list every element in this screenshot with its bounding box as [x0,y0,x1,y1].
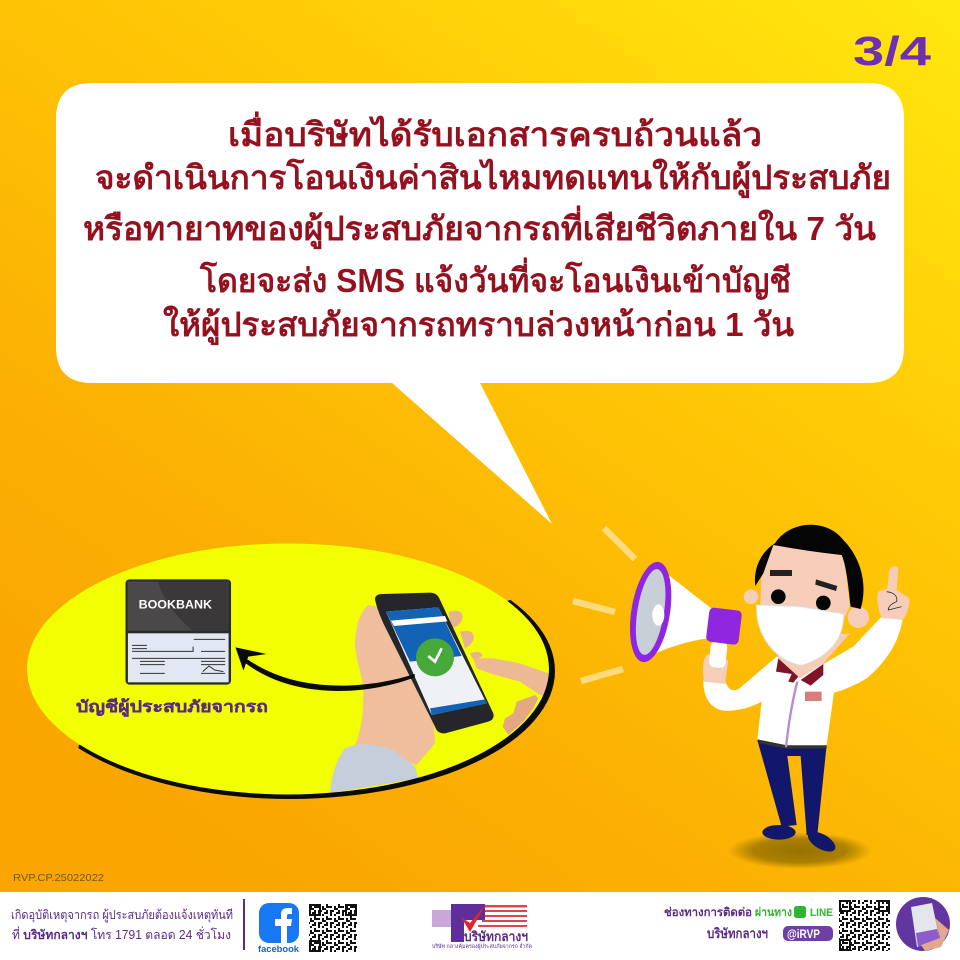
account label: บัญชีผู้ประสบภัยจากรถ [76,697,268,718]
neck [777,633,850,678]
pointing hand [473,658,548,695]
shirt and arms [703,617,903,745]
QR code facebook [309,904,357,952]
ellipse swoosh [78,600,555,799]
main message: จะดำเนินการโอนเงินค่าสินไหมทดแทนให้กับผู้ประสบภัย [95,158,891,199]
fingers behind phone [448,611,482,661]
yellow ellipse panel [27,544,549,794]
raised hand [877,566,909,619]
logo: บริษัทกลางฯ [464,929,528,944]
ray lines [573,528,635,681]
hand holding megaphone [703,654,728,684]
belt [757,738,827,749]
zipper and badge [786,682,822,747]
main message: ให้ผู้ประสบภัยจากรถทราบล่วงหน้าก่อน 1 วัน [163,305,794,346]
shadow [728,832,872,869]
main message: เมื่อบริษัทได้รับเอกสารครบถ้วนแล้ว [228,111,762,153]
collar [776,658,823,686]
accident notice [11,908,233,942]
QR code contact [839,900,890,951]
logo [432,904,532,950]
page number: 3/4 [853,28,931,74]
accident notice: เกิดอุบัติเหตุจากรถ ผู้ประสบภัยต้องแจ้งเหตุทันที [11,908,233,923]
megaphone [624,559,742,668]
icon: facebook: facebook [258,944,300,955]
mask [757,605,843,665]
phone [375,593,494,733]
main message [83,111,891,346]
contact channels: @iRVP [787,929,820,941]
accident notice: ที่ บริษัทกลางฯ โทร 1791 ตลอด 24 ชั่วโมง [12,926,231,942]
contact channels: LINE [810,907,833,919]
phone app circle [896,897,950,951]
logo: บริษัท กลางคุ้มครองผู้ประสบภัยจากรถ จำกัด [432,943,532,950]
contact channels: ผ่านทาง [755,906,792,919]
sleeve [330,745,418,793]
legs [757,740,839,856]
arrow [236,647,415,691]
main message: โดยจะส่ง SMS แจ้งวันที่จะโอนเงินเข้าบัญชี [199,257,791,300]
reference code: RVP.CP.25022022 [13,872,104,884]
contact channels: บริษัทกลางฯ [707,926,768,941]
character with megaphone [624,525,909,869]
contact channels: ช่องทางการติดต่อ [664,906,752,919]
icon: facebook [258,903,300,955]
icon: bookbank: BOOKBANK [139,598,213,612]
contact channels [664,906,833,941]
icon: bookbank [126,579,231,685]
footer bar [0,892,960,960]
holding hand [355,605,435,765]
main message: หรือทายาทของผู้ประสบภัยจากรถที่เสียชีวิตภายใน 7 วัน [83,205,876,250]
hands and phone [330,593,548,793]
head [744,525,869,665]
speech bubble [56,83,904,524]
